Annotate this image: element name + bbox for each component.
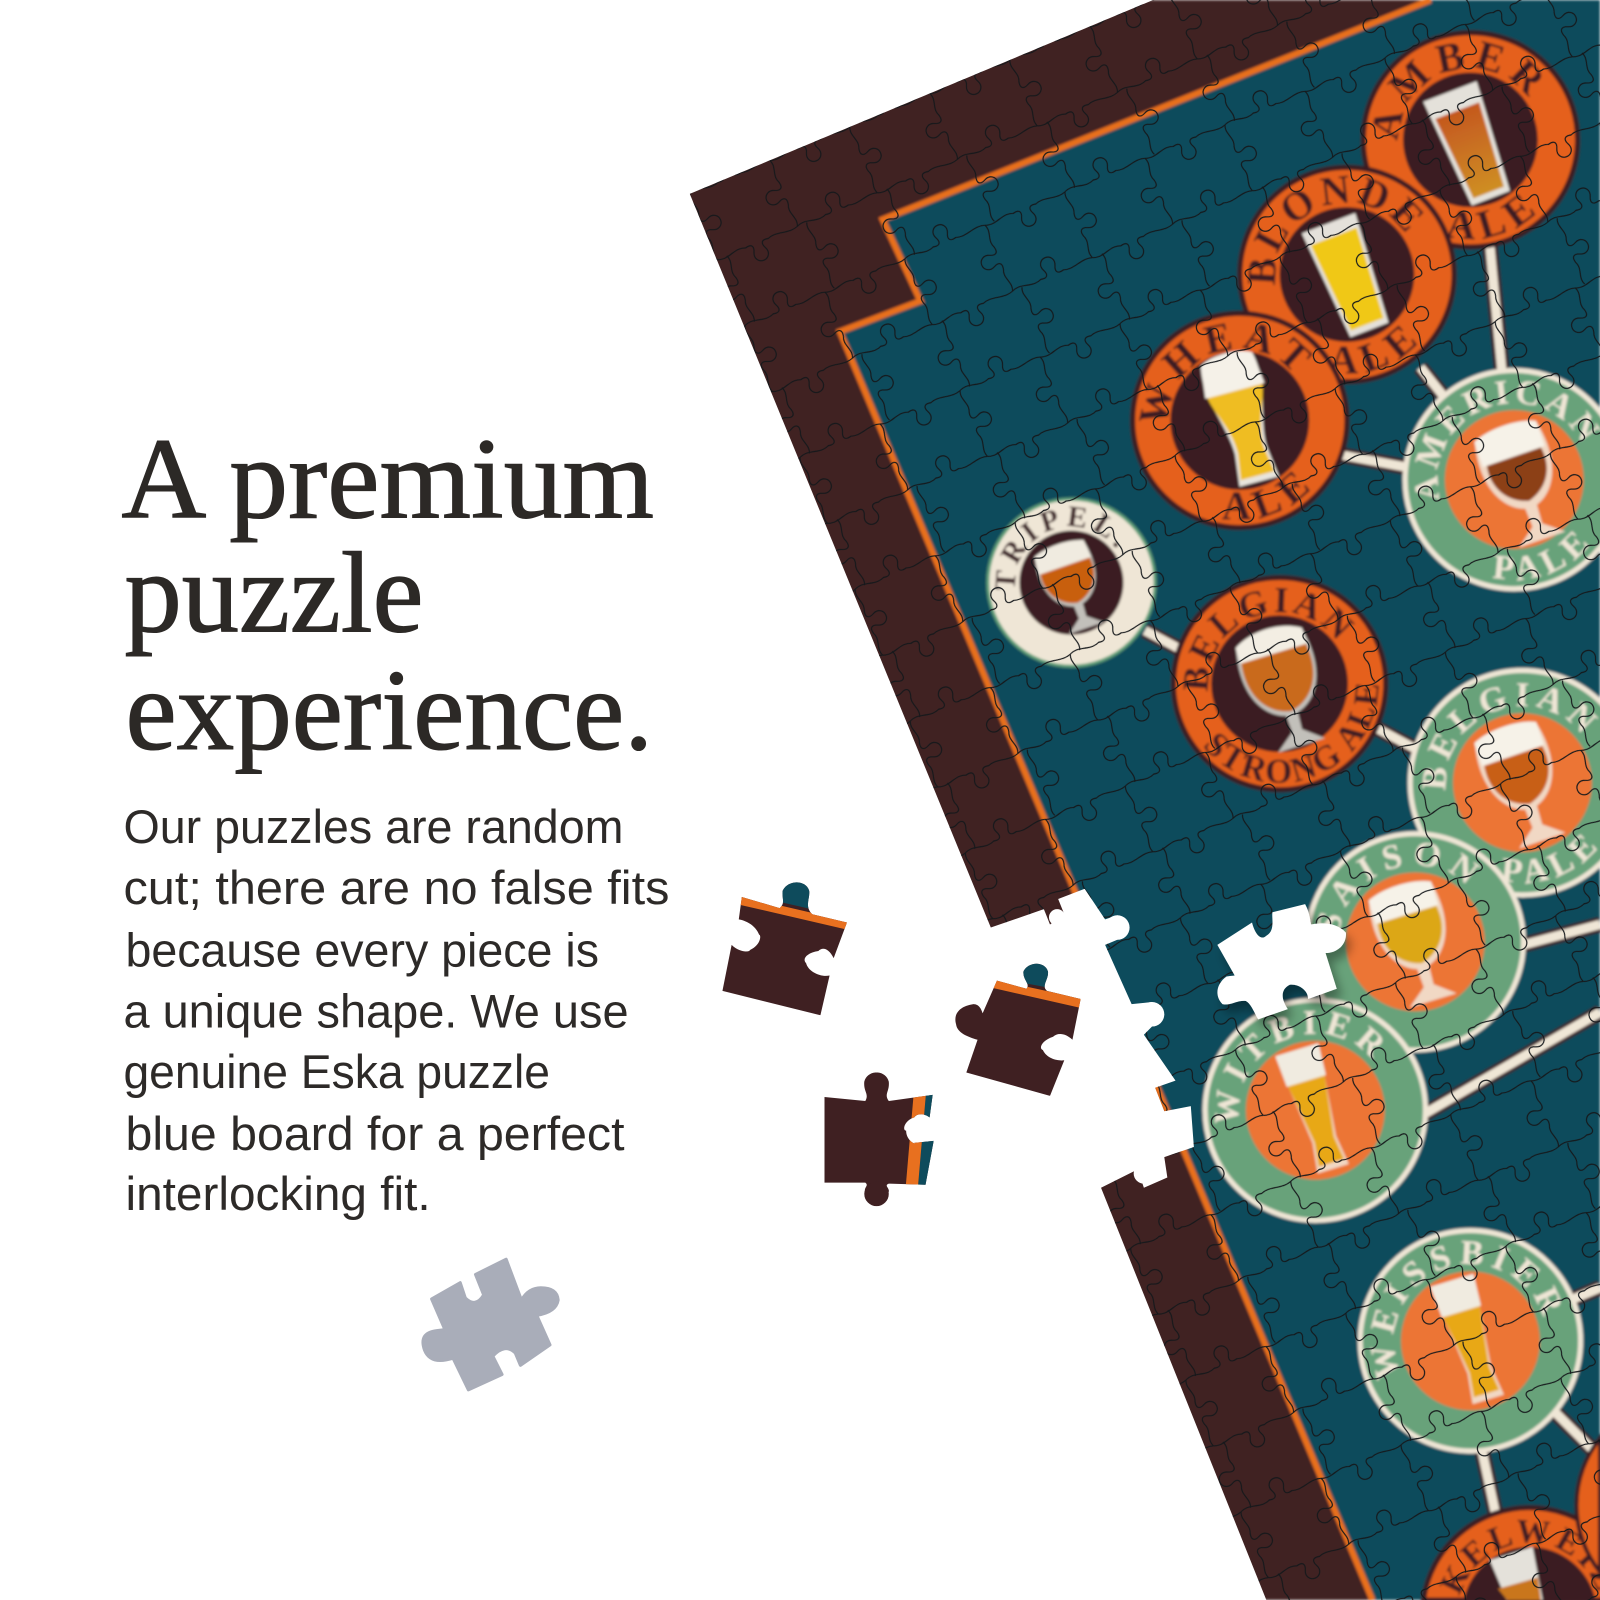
badge: saison: [1307, 828, 1528, 1056]
badge: blonde ale: [1236, 163, 1458, 387]
badge: tripel: [984, 495, 1159, 670]
board art: [690, 0, 1600, 1600]
missing piece notches: [1049, 909, 1164, 1184]
loose piece: top-left brown: [722, 882, 847, 1016]
body text: because every piece is: [126, 924, 599, 976]
body text: Our puzzles are random: [123, 801, 623, 853]
body text: genuine Eska puzzle: [123, 1046, 550, 1098]
badge: blonde ale: BLONDE: [1246, 174, 1424, 286]
body text: blue board for a perfect: [126, 1108, 624, 1160]
badge: weissbier: WEISSBIER: [1369, 1239, 1562, 1382]
body text: [123, 801, 669, 1220]
headline: puzzle: [124, 529, 423, 657]
badge: belgian pale: [1404, 665, 1600, 900]
body text: cut; there are no false fits: [123, 862, 669, 914]
badge: tripel: TRIPEL.: [994, 504, 1120, 591]
badge: american pale: PALE: [1491, 530, 1590, 582]
connector lines: [1145, 245, 1600, 1515]
loose piece: grey back side: [423, 1259, 558, 1390]
body text: interlocking fit.: [126, 1168, 431, 1220]
teal field with orange rule: [840, 0, 1600, 1600]
headline: [121, 414, 654, 774]
headline: A premium: [121, 414, 654, 542]
badge: saison: SAISON: [1316, 841, 1482, 928]
loose piece: middle brown: [955, 964, 1081, 1096]
body text: a unique shape. We use: [123, 986, 629, 1038]
badge: amber ale: ALE: [1446, 193, 1536, 241]
badge: american pale: [1400, 365, 1600, 594]
badge: wheat ale: WHEAT: [1138, 322, 1313, 422]
lower brown piece bottom knob: [864, 1182, 889, 1206]
badge: wheat ale: [1128, 308, 1352, 532]
headline: experience.: [126, 646, 653, 774]
brown border: [690, 0, 1423, 1600]
puzzle board: [690, 0, 1600, 1600]
loose piece: lower brown: [824, 1072, 934, 1192]
badge: belgian strong ale: STRONG ALE: [1203, 683, 1380, 784]
orange rule: [840, 0, 1431, 1600]
badge: witbier: [1200, 995, 1430, 1226]
badge: wheat ale: ALE: [1221, 470, 1311, 521]
white puzzle piece: [1217, 904, 1346, 1019]
badge: witbier: WITBIER: [1212, 1009, 1384, 1124]
badge: amber ale: AMBER: [1372, 40, 1543, 142]
badge: partial orange right: [1577, 1438, 1600, 1572]
badge: belgian strong ale: [1169, 573, 1390, 794]
badge: blonde ale: ALE: [1332, 324, 1418, 375]
badge: amber ale: [1359, 28, 1582, 252]
badge: weissbier: [1354, 1225, 1586, 1456]
badge: belgian strong ale: BELGIAN: [1182, 586, 1356, 692]
jigsaw cut lines: [673, 0, 1600, 1600]
